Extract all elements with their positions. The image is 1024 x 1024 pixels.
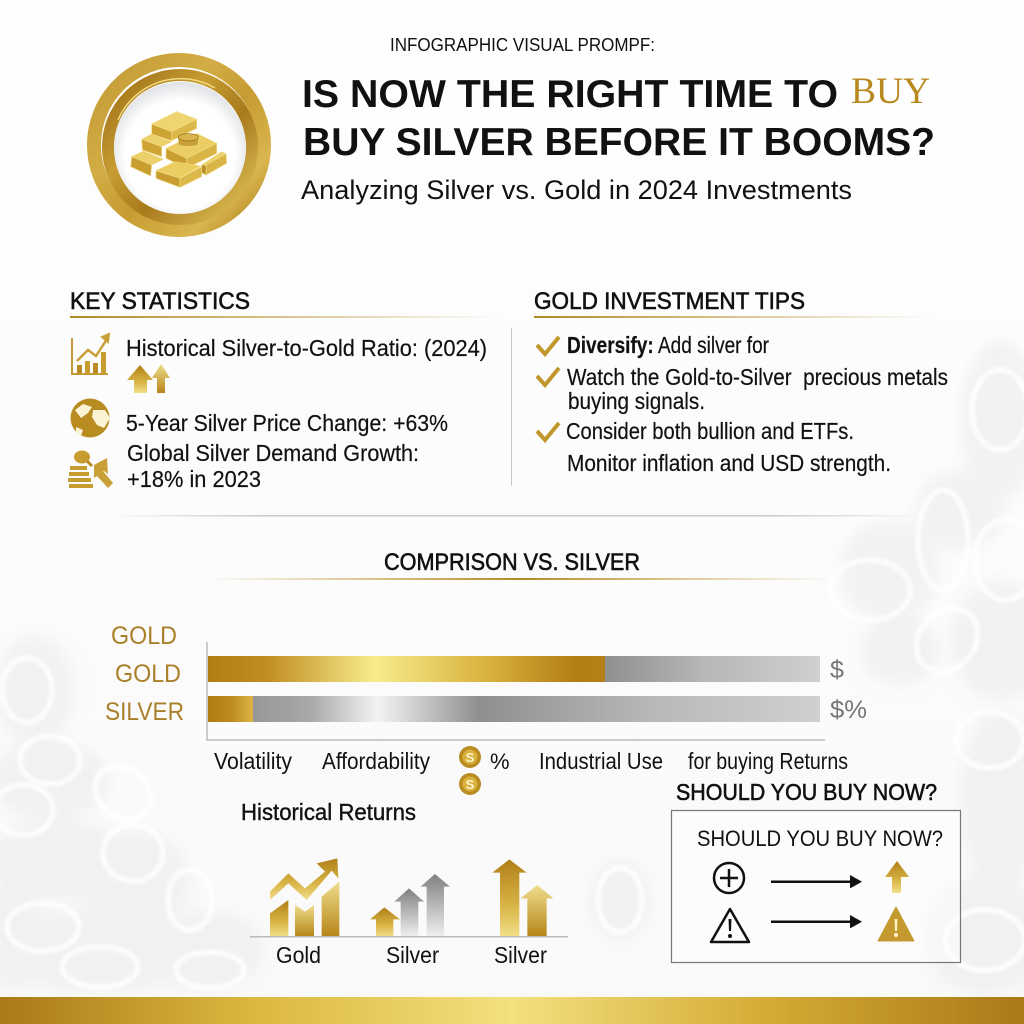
icon: coin [459, 773, 481, 795]
label: silver: Silver [494, 942, 547, 968]
stat: silver to gold ratio: Historical Silver-to-Gold Ratio: (2024) [126, 335, 487, 361]
icon: gold warning [878, 907, 914, 941]
tip: ratio continued: buying signals. [568, 388, 705, 414]
bar: gold row [208, 656, 820, 682]
icon: plus in circle [714, 863, 744, 893]
icon: gold up arrow [885, 861, 909, 893]
header text [301, 35, 935, 205]
heading: comparison: COMPRISON VS. SILVER [384, 549, 640, 576]
bar chart [105, 622, 867, 795]
tip: ratio: Watch the Gold-to-Silver precious metals [567, 364, 948, 390]
row label: silver: SILVER [105, 698, 184, 726]
panel: key statistics [68, 288, 500, 492]
stat: demand growth: Global Silver Demand Growth: [127, 440, 419, 466]
icon: check 1 [537, 337, 559, 354]
chart: historical returns [241, 799, 568, 968]
icon: gold arrows [492, 859, 553, 937]
icon: gold rising chart [270, 858, 339, 937]
subtitle: Analyzing Silver vs. Gold in 2024 Investments [301, 175, 852, 205]
title line 2: BUY SILVER BEFORE IT BOOMS? [303, 121, 935, 164]
label: silver: Silver [386, 942, 439, 968]
axis label: industrial use: Industrial Use [539, 748, 663, 774]
icon: silver arrows [370, 874, 450, 937]
axis label: returns: for buying Returns [688, 748, 848, 774]
value: dollar percent: $% [830, 696, 867, 724]
icon: coin [459, 746, 481, 768]
icon: rising chart [72, 334, 109, 374]
label: gold: Gold [276, 942, 321, 968]
icon: coin: S [466, 777, 475, 792]
icon: twin up arrows [127, 364, 170, 393]
heading: historical returns: Historical Returns [241, 799, 416, 825]
icon: coin: S [466, 750, 475, 765]
row label: gold: GOLD [115, 660, 181, 688]
title line 1: IS NOW THE RIGHT TIME TO [302, 73, 838, 116]
icon: globe [70, 398, 110, 438]
axis label: affordability: Affordability [322, 748, 430, 774]
panel: gold investment tips [534, 288, 948, 476]
icon: gold ring with bullion stack [94, 60, 264, 230]
arrow: warning to caution [771, 915, 862, 928]
stat: price change: 5-Year Silver Price Change: +63% [126, 410, 448, 436]
panel divider [511, 328, 512, 486]
footer bar [0, 997, 1024, 1024]
serif accent word: BUY [851, 71, 930, 112]
callout: should you buy now [672, 779, 960, 962]
value: dollar: $ [830, 656, 844, 684]
tip: inflation: Monitor inflation and USD strength. [567, 450, 891, 476]
icon: coins and arrow [68, 450, 113, 488]
stat: demand growth value: +18% in 2023 [127, 466, 261, 492]
icon: warning outline [711, 909, 749, 942]
row label: gold: GOLD [111, 622, 177, 650]
icon: check 3 [537, 423, 559, 440]
tip: diversify: Diversify: Add silver for [567, 332, 769, 358]
tip: bullion: Consider both bullion and ETFs. [566, 418, 854, 444]
callout box [672, 810, 960, 962]
icon: check 2 [537, 368, 559, 385]
axis label: percent: % [490, 749, 510, 774]
section rule [110, 515, 920, 516]
heading: gold investment tips: GOLD INVESTMENT TIPS [534, 288, 805, 315]
eyebrow: INFOGRAPHIC VISUAL PROMPF: [390, 35, 655, 55]
bar: silver row [208, 696, 820, 722]
axis label: volatility: Volatility [214, 748, 292, 774]
heading: key statistics: KEY STATISTICS [70, 288, 250, 315]
callout heading: SHOULD YOU BUY NOW? [676, 779, 937, 805]
callout box heading: SHOULD YOU BUY NOW? [697, 826, 943, 851]
arrow: plus to up [771, 875, 862, 888]
